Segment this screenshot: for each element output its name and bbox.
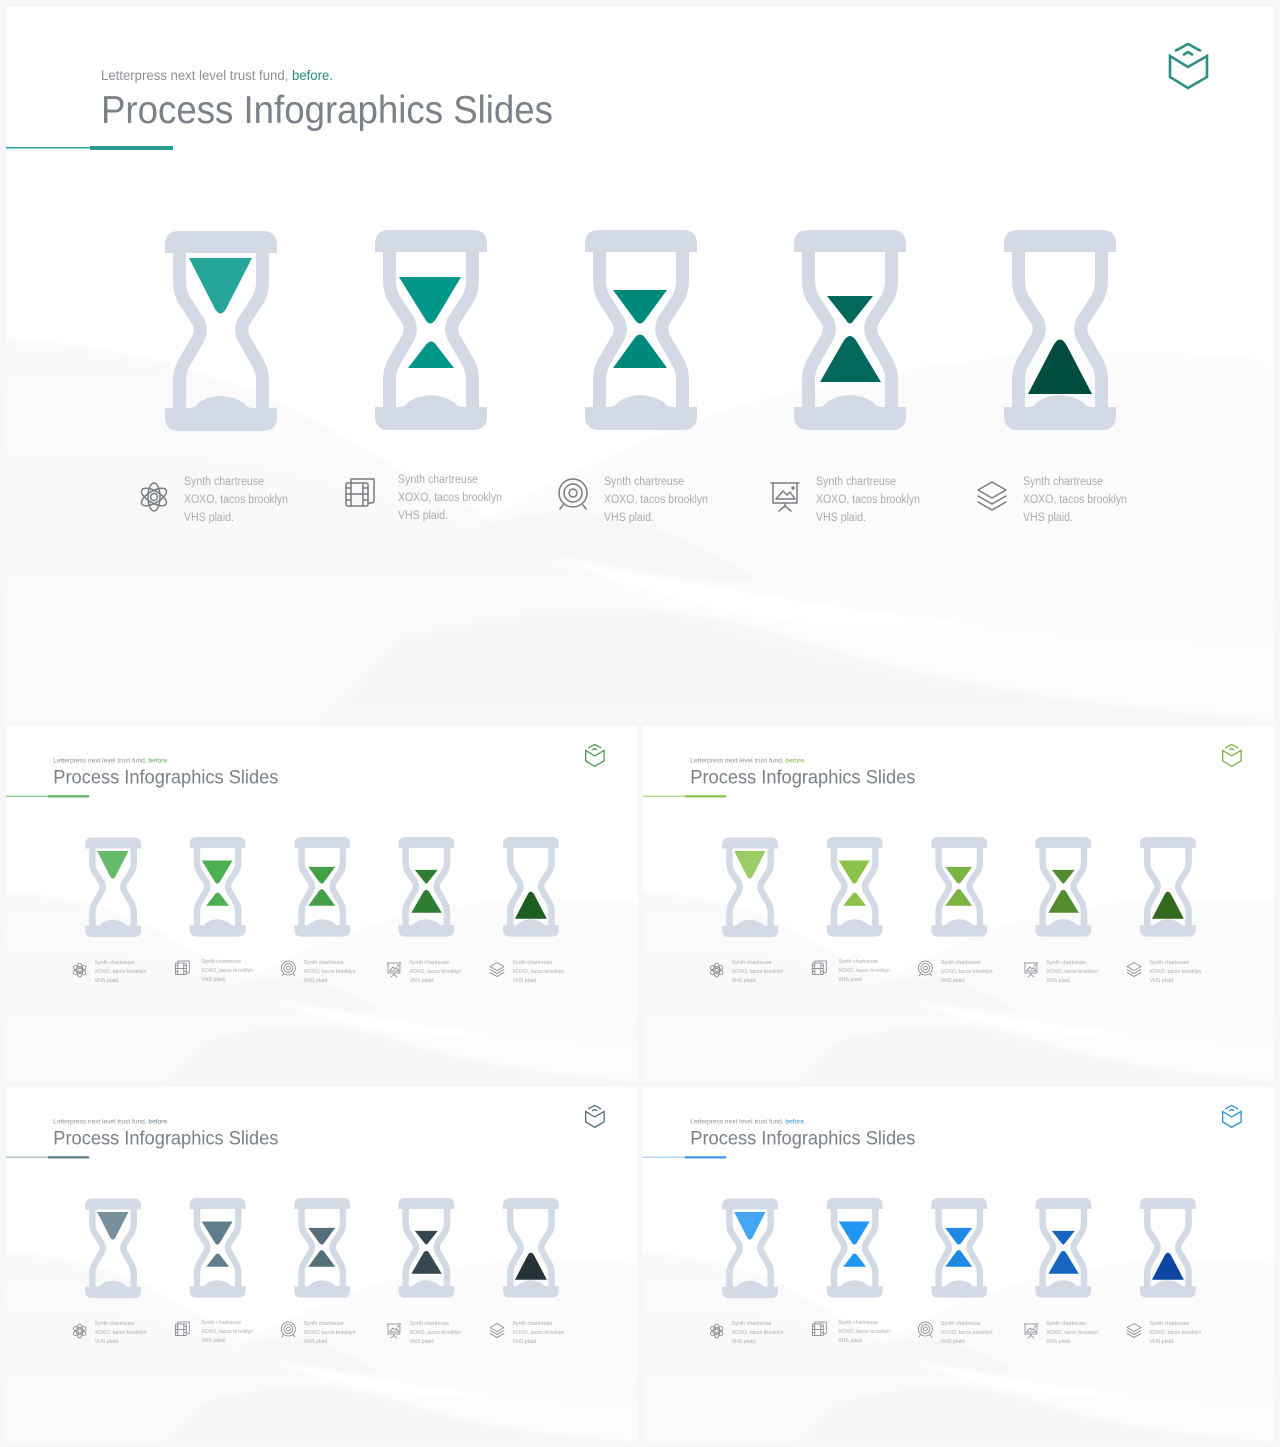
title underline [6, 1156, 89, 1158]
caption 5: Synth chartreuse [1149, 1321, 1189, 1327]
caption 3: Synth chartreuse [604, 476, 684, 488]
icon: presentation [1024, 963, 1038, 977]
caption 3: Synth chartreuse [304, 1321, 344, 1327]
caption 4: VHS plaid. [816, 512, 866, 524]
caption 2: VHS plaid. [398, 510, 448, 522]
caption 4: Synth chartreuse [409, 1321, 449, 1327]
caption 2: VHS plaid. [201, 1338, 226, 1344]
hourglass 4 [398, 837, 454, 937]
icon: presentation [1024, 1324, 1038, 1338]
hourglass 3 [294, 1198, 350, 1298]
caption 1: XOXO, tacos brooklyn [95, 1330, 146, 1336]
caption 5: Synth chartreuse [512, 960, 552, 966]
hourglass 5 [1140, 837, 1196, 937]
hourglass 3 [931, 1198, 987, 1298]
caption 2: XOXO, tacos brooklyn [201, 1329, 253, 1335]
caption 5: VHS plaid. [1023, 512, 1073, 524]
caption 5: XOXO, tacos brooklyn [512, 969, 564, 975]
icon: target [918, 961, 932, 976]
caption 3: Synth chartreuse [304, 960, 344, 966]
subtitle: Letterpress next level trust fund, before. [690, 1118, 806, 1125]
hourglass 4 [1035, 837, 1091, 937]
caption 2: Synth chartreuse [201, 959, 241, 965]
caption 1: Synth chartreuse [184, 476, 264, 488]
panel: light green slide [635, 726, 1280, 1091]
hourglass 3 [931, 837, 987, 937]
hourglass 2 [190, 1198, 246, 1298]
caption 1: Synth chartreuse [732, 1321, 771, 1327]
title: Process Infographics Slides [53, 766, 278, 788]
icon: film [175, 961, 189, 975]
caption 4: Synth chartreuse [1046, 960, 1086, 966]
caption 2: Synth chartreuse [398, 474, 478, 486]
caption 3: VHS plaid. [941, 1339, 966, 1345]
caption 2: VHS plaid. [201, 977, 226, 983]
hourglass 3 [585, 230, 697, 430]
caption 4: XOXO, tacos brooklyn [816, 494, 920, 506]
caption 5: XOXO, tacos brooklyn [1149, 969, 1201, 975]
icon: cube logo [1170, 44, 1207, 88]
hourglass 1 [165, 231, 277, 431]
subtitle: Letterpress next level trust fund, before. [53, 757, 169, 764]
icon: presentation [771, 483, 799, 511]
caption 2: XOXO, tacos brooklyn [838, 1329, 890, 1335]
caption 1: VHS plaid. [95, 1339, 120, 1345]
hourglass 1 [85, 1199, 141, 1298]
title: Process Infographics Slides [101, 89, 553, 132]
caption 5: Synth chartreuse [1023, 476, 1103, 488]
title underline [6, 795, 89, 797]
icon: atom [72, 963, 87, 977]
hourglass 4 [1035, 1198, 1091, 1298]
caption 4: VHS plaid. [409, 978, 435, 984]
icon: target [281, 961, 295, 976]
caption 3: XOXO, tacos brooklyn [941, 969, 993, 975]
hourglass 5 [503, 837, 559, 937]
icon: cube logo [1223, 744, 1241, 766]
icon: target [918, 1322, 932, 1337]
icon: cube logo [1223, 1105, 1241, 1127]
icon: atom [139, 483, 169, 511]
caption 1: Synth chartreuse [732, 960, 771, 966]
hourglass 3 [294, 837, 350, 937]
caption 5: Synth chartreuse [512, 1321, 552, 1327]
icon: atom [72, 1324, 87, 1338]
icon: presentation [387, 1324, 401, 1338]
hourglass 5 [1004, 230, 1116, 430]
caption 1: XOXO, tacos brooklyn [184, 494, 288, 506]
caption 1: VHS plaid. [732, 978, 757, 984]
caption 1: Synth chartreuse [95, 1321, 134, 1327]
panel: main teal slide [0, 7, 1280, 740]
panel: slate slide [0, 1087, 645, 1447]
hourglass 2 [827, 1198, 883, 1298]
caption 2: XOXO, tacos brooklyn [398, 492, 502, 504]
caption 4: XOXO, tacos brooklyn [409, 969, 461, 975]
icon: layers [1127, 963, 1141, 976]
caption 1: VHS plaid. [184, 512, 234, 524]
caption 4: Synth chartreuse [409, 960, 449, 966]
title underline [643, 795, 726, 797]
icon: cube logo [586, 1105, 604, 1127]
title underline [6, 146, 173, 150]
icon: layers [978, 482, 1006, 510]
caption 1: VHS plaid. [95, 978, 120, 984]
icon: layers [490, 963, 504, 976]
caption 1: XOXO, tacos brooklyn [95, 969, 146, 975]
title: Process Infographics Slides [690, 1127, 915, 1149]
icon: cube logo [586, 744, 604, 766]
icon: target [281, 1322, 295, 1337]
icon: target [559, 479, 587, 509]
caption 5: VHS plaid. [512, 978, 538, 984]
icon: film [812, 1322, 826, 1336]
icon: atom [709, 963, 724, 977]
caption 4: Synth chartreuse [1046, 1321, 1086, 1327]
caption 3: VHS plaid. [941, 978, 966, 984]
caption 4: VHS plaid. [409, 1339, 435, 1345]
panel: green slide [0, 726, 645, 1091]
caption 2: Synth chartreuse [838, 1320, 878, 1326]
icon: film [175, 1322, 189, 1336]
icon: presentation [387, 963, 401, 977]
caption 2: Synth chartreuse [201, 1320, 241, 1326]
caption 5: XOXO, tacos brooklyn [1149, 1330, 1201, 1336]
hourglass 4 [794, 230, 906, 430]
caption 5: VHS plaid. [1149, 978, 1175, 984]
hourglass 5 [1140, 1198, 1196, 1298]
subtitle: Letterpress next level trust fund, before. [101, 68, 333, 83]
caption 5: XOXO, tacos brooklyn [1023, 494, 1127, 506]
caption 3: XOXO, tacos brooklyn [604, 494, 708, 506]
panel: blue slide [635, 1087, 1280, 1447]
icon: layers [490, 1324, 504, 1337]
caption 4: VHS plaid. [1046, 1339, 1072, 1345]
caption 3: VHS plaid. [304, 978, 329, 984]
caption 3: VHS plaid. [304, 1339, 329, 1345]
icon: layers [1127, 1324, 1141, 1337]
caption 5: VHS plaid. [512, 1339, 538, 1345]
icon: film [346, 479, 374, 506]
hourglass 1 [85, 838, 141, 937]
caption 3: Synth chartreuse [941, 1321, 981, 1327]
title: Process Infographics Slides [53, 1127, 278, 1149]
caption 3: VHS plaid. [604, 512, 654, 524]
caption 3: XOXO, tacos brooklyn [941, 1330, 993, 1336]
caption 3: XOXO, tacos brooklyn [304, 969, 356, 975]
title underline [643, 1156, 726, 1158]
hourglass 4 [398, 1198, 454, 1298]
hourglass 2 [827, 837, 883, 937]
caption 4: XOXO, tacos brooklyn [409, 1330, 461, 1336]
icon: atom [709, 1324, 724, 1338]
caption 3: XOXO, tacos brooklyn [304, 1330, 356, 1336]
caption 2: VHS plaid. [838, 1338, 863, 1344]
caption 4: XOXO, tacos brooklyn [1046, 1330, 1098, 1336]
title: Process Infographics Slides [690, 766, 915, 788]
subtitle: Letterpress next level trust fund, before. [53, 1118, 169, 1125]
caption 1: VHS plaid. [732, 1339, 757, 1345]
caption 4: XOXO, tacos brooklyn [1046, 969, 1098, 975]
caption 2: XOXO, tacos brooklyn [838, 968, 890, 974]
caption 2: XOXO, tacos brooklyn [201, 968, 253, 974]
caption 3: Synth chartreuse [941, 960, 981, 966]
caption 5: Synth chartreuse [1149, 960, 1189, 966]
caption 4: VHS plaid. [1046, 978, 1072, 984]
caption 2: VHS plaid. [838, 977, 863, 983]
subtitle: Letterpress next level trust fund, before. [690, 757, 806, 764]
hourglass 1 [722, 1199, 778, 1298]
hourglass 2 [190, 837, 246, 937]
caption 4: Synth chartreuse [816, 476, 896, 488]
caption 1: XOXO, tacos brooklyn [732, 1330, 783, 1336]
caption 2: Synth chartreuse [838, 959, 878, 965]
icon: film [812, 961, 826, 975]
hourglass 2 [375, 230, 487, 430]
hourglass 1 [722, 838, 778, 937]
caption 1: XOXO, tacos brooklyn [732, 969, 783, 975]
hourglass 5 [503, 1198, 559, 1298]
caption 5: XOXO, tacos brooklyn [512, 1330, 564, 1336]
caption 1: Synth chartreuse [95, 960, 134, 966]
caption 5: VHS plaid. [1149, 1339, 1175, 1345]
